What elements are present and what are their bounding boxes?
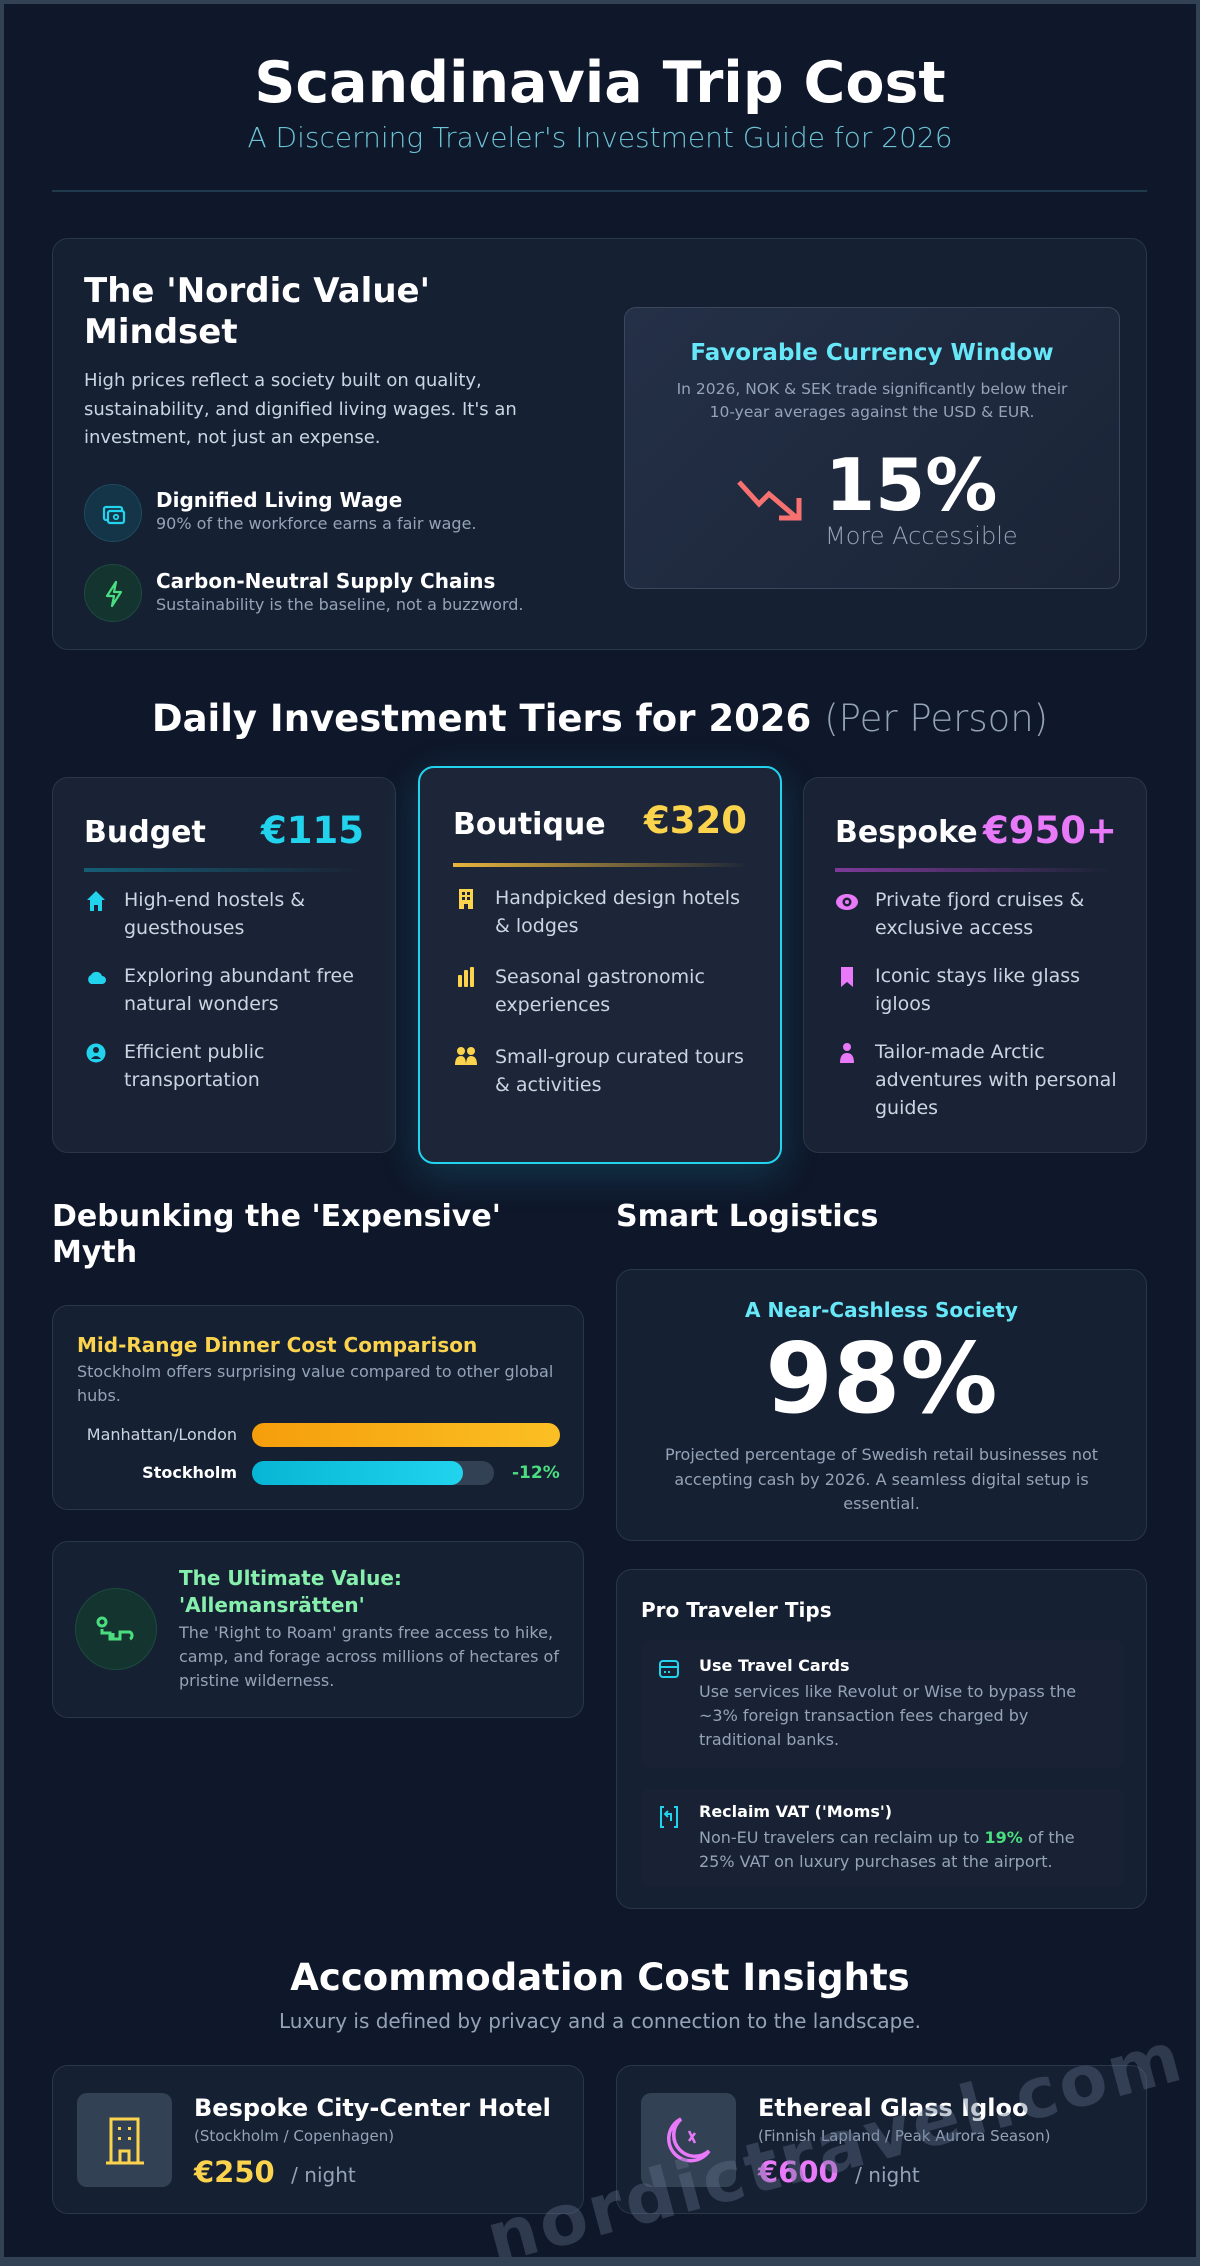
- item: dignified wage: [156, 488, 477, 533]
- icon: moon: [641, 2093, 736, 2187]
- panel: city hotel: Bespoke City-Center Hotel: [194, 2094, 551, 2122]
- panel: bespoke: [803, 777, 1147, 1153]
- bar chart: -12%: [512, 1463, 560, 1483]
- icon: roam: [75, 1588, 157, 1670]
- panel: budget: High-end hostels & guesthouses: [124, 889, 305, 939]
- panel: dinner comparison chart: Stockholm offers surprising value compared to other global hubs.: [77, 1362, 553, 1405]
- tip: travel cards: Use services like Revolut or Wise to bypass the ~3% foreign transaction fees charged by traditional banks.: [699, 1682, 1076, 1749]
- icon: bookmark: [841, 967, 853, 987]
- item: carbon neutral: [156, 569, 524, 614]
- callout: currency window: 15%: [825, 443, 997, 527]
- panel: dinner comparison chart: Mid-Range Dinner Cost Comparison: [77, 1333, 477, 1357]
- panel: boutique: Handpicked design hotels & lodges: [495, 887, 740, 937]
- panel: nordic value mindset: [52, 238, 1147, 650]
- panel: bespoke: Bespoke: [835, 815, 978, 850]
- bar chart: [87, 1423, 560, 1485]
- tip: reclaim vat: Reclaim VAT ('Moms'): [699, 1802, 892, 1821]
- heading: smart logistics: Smart Logistics: [616, 1199, 878, 1234]
- text block: High prices reflect a society built on quality, sustainability, and dignified living wages. It's an investment, not just an expense.: [84, 370, 517, 448]
- heading: daily tiers: Daily Investment Tiers for 2026 (Per Person): [152, 697, 1048, 740]
- icon: eye: [836, 894, 858, 910]
- panel: boutique: €320: [644, 799, 747, 842]
- panel: city hotel: (Stockholm / Copenhagen): [194, 2127, 394, 2145]
- item: dignified wage: 90% of the workforce earns a fair wage.: [156, 514, 477, 533]
- panel: glass igloo: [616, 2065, 1147, 2214]
- title: Scandinavia Trip Cost: [254, 50, 946, 116]
- tip: travel cards: Use Travel Cards: [699, 1656, 850, 1675]
- panel: bespoke: €950+: [983, 809, 1117, 852]
- item: carbon neutral: Sustainability is the baseline, not a buzzword.: [156, 595, 524, 614]
- panel: glass igloo: (Finnish Lapland / Peak Aurora Season): [758, 2127, 1050, 2145]
- icon: person: [86, 1044, 106, 1062]
- bar chart: Manhattan/London: [87, 1425, 237, 1444]
- panel: city hotel: €250 / night: [194, 2155, 356, 2189]
- callout: currency window: In 2026, NOK & SEK trade significantly below their 10-year averages against the USD & EUR.: [677, 380, 1067, 421]
- panel: boutique: Seasonal gastronomic experiences: [495, 966, 705, 1016]
- panel: glass igloo: Ethereal Glass Igloo: [758, 2094, 1028, 2122]
- icon: down arrow: [737, 480, 802, 520]
- subtitle: A Discerning Traveler's Investment Guide for 2026: [247, 121, 953, 154]
- icon: home: [87, 891, 105, 911]
- callout: currency window: Favorable Currency Window: [690, 340, 1054, 366]
- panel: bespoke: Iconic stays like glass igloos: [875, 965, 1080, 1015]
- icon: group: [455, 1047, 477, 1065]
- panel: budget: Exploring abundant free natural wonders: [124, 965, 354, 1015]
- panel: bespoke: Private fjord cruises & exclusive access: [875, 889, 1084, 939]
- callout: currency window: [624, 307, 1120, 589]
- panel: bespoke: Tailor-made Arctic adventures with personal guides: [875, 1041, 1117, 1119]
- panel: budget: Budget: [84, 815, 206, 850]
- panel: budget: [52, 777, 396, 1153]
- tip: reclaim vat: [641, 1789, 1124, 1887]
- heading: accommodation: Accommodation Cost Insights: [290, 1956, 910, 1999]
- item: dignified wage: Dignified Living Wage: [156, 488, 402, 512]
- panel: glass igloo: €600 / night: [758, 2155, 920, 2189]
- icon: hotel: [77, 2093, 172, 2187]
- panel: cashless: [616, 1269, 1147, 1541]
- panel: pro tips: Pro Traveler Tips: [641, 1598, 832, 1622]
- item: carbon neutral: Carbon-Neutral Supply Chains: [156, 569, 495, 593]
- panel: budget: Efficient public transportation: [124, 1041, 264, 1091]
- heading: debunking: Debunking the 'Expensive' Myth: [52, 1199, 501, 1270]
- subtitle: accommodation: Luxury is defined by privacy and a connection to the landscape.: [279, 2009, 921, 2033]
- panel: allemansratten: The 'Right to Roam' grants free access to hike, camp, and forage across millions of hectares of pristine wilderness.: [179, 1623, 559, 1690]
- tip: reclaim vat: Non-EU travelers can reclaim up to 19% of the 25% VAT on luxury purchases at the airport.: [699, 1828, 1075, 1871]
- panel: allemansratten: The Ultimate Value: 'Allemansrätten': [179, 1566, 402, 1617]
- panel: boutique: [418, 766, 782, 1164]
- panel: cashless: A Near-Cashless Society: [745, 1298, 1018, 1322]
- panel: dinner comparison chart: [52, 1305, 584, 1510]
- tip: travel cards: [641, 1640, 1124, 1768]
- panel: cashless: 98%: [765, 1322, 998, 1435]
- callout: currency window: More Accessible: [825, 522, 1018, 550]
- heading: The 'Nordic Value' Mindset: [84, 271, 430, 352]
- icon: person: [840, 1043, 854, 1063]
- icon: wage: [84, 484, 142, 542]
- icon: building: [459, 889, 473, 909]
- panel: city hotel: [52, 2065, 584, 2214]
- icon: bars: [458, 967, 474, 987]
- icon: cloud: [88, 972, 106, 984]
- icon: bolt: [84, 564, 142, 622]
- panel: pro tips: [616, 1569, 1147, 1909]
- panel: allemansratten: [52, 1541, 584, 1718]
- panel: boutique: Boutique: [453, 807, 606, 842]
- panel: budget: €115: [261, 809, 364, 852]
- panel: cashless: Projected percentage of Swedish retail businesses not accepting cash by 2026. A seamless digital setup is essential.: [665, 1445, 1098, 1513]
- panel: boutique: Small-group curated tours & activities: [495, 1046, 744, 1096]
- bar chart: Stockholm: [142, 1463, 237, 1482]
